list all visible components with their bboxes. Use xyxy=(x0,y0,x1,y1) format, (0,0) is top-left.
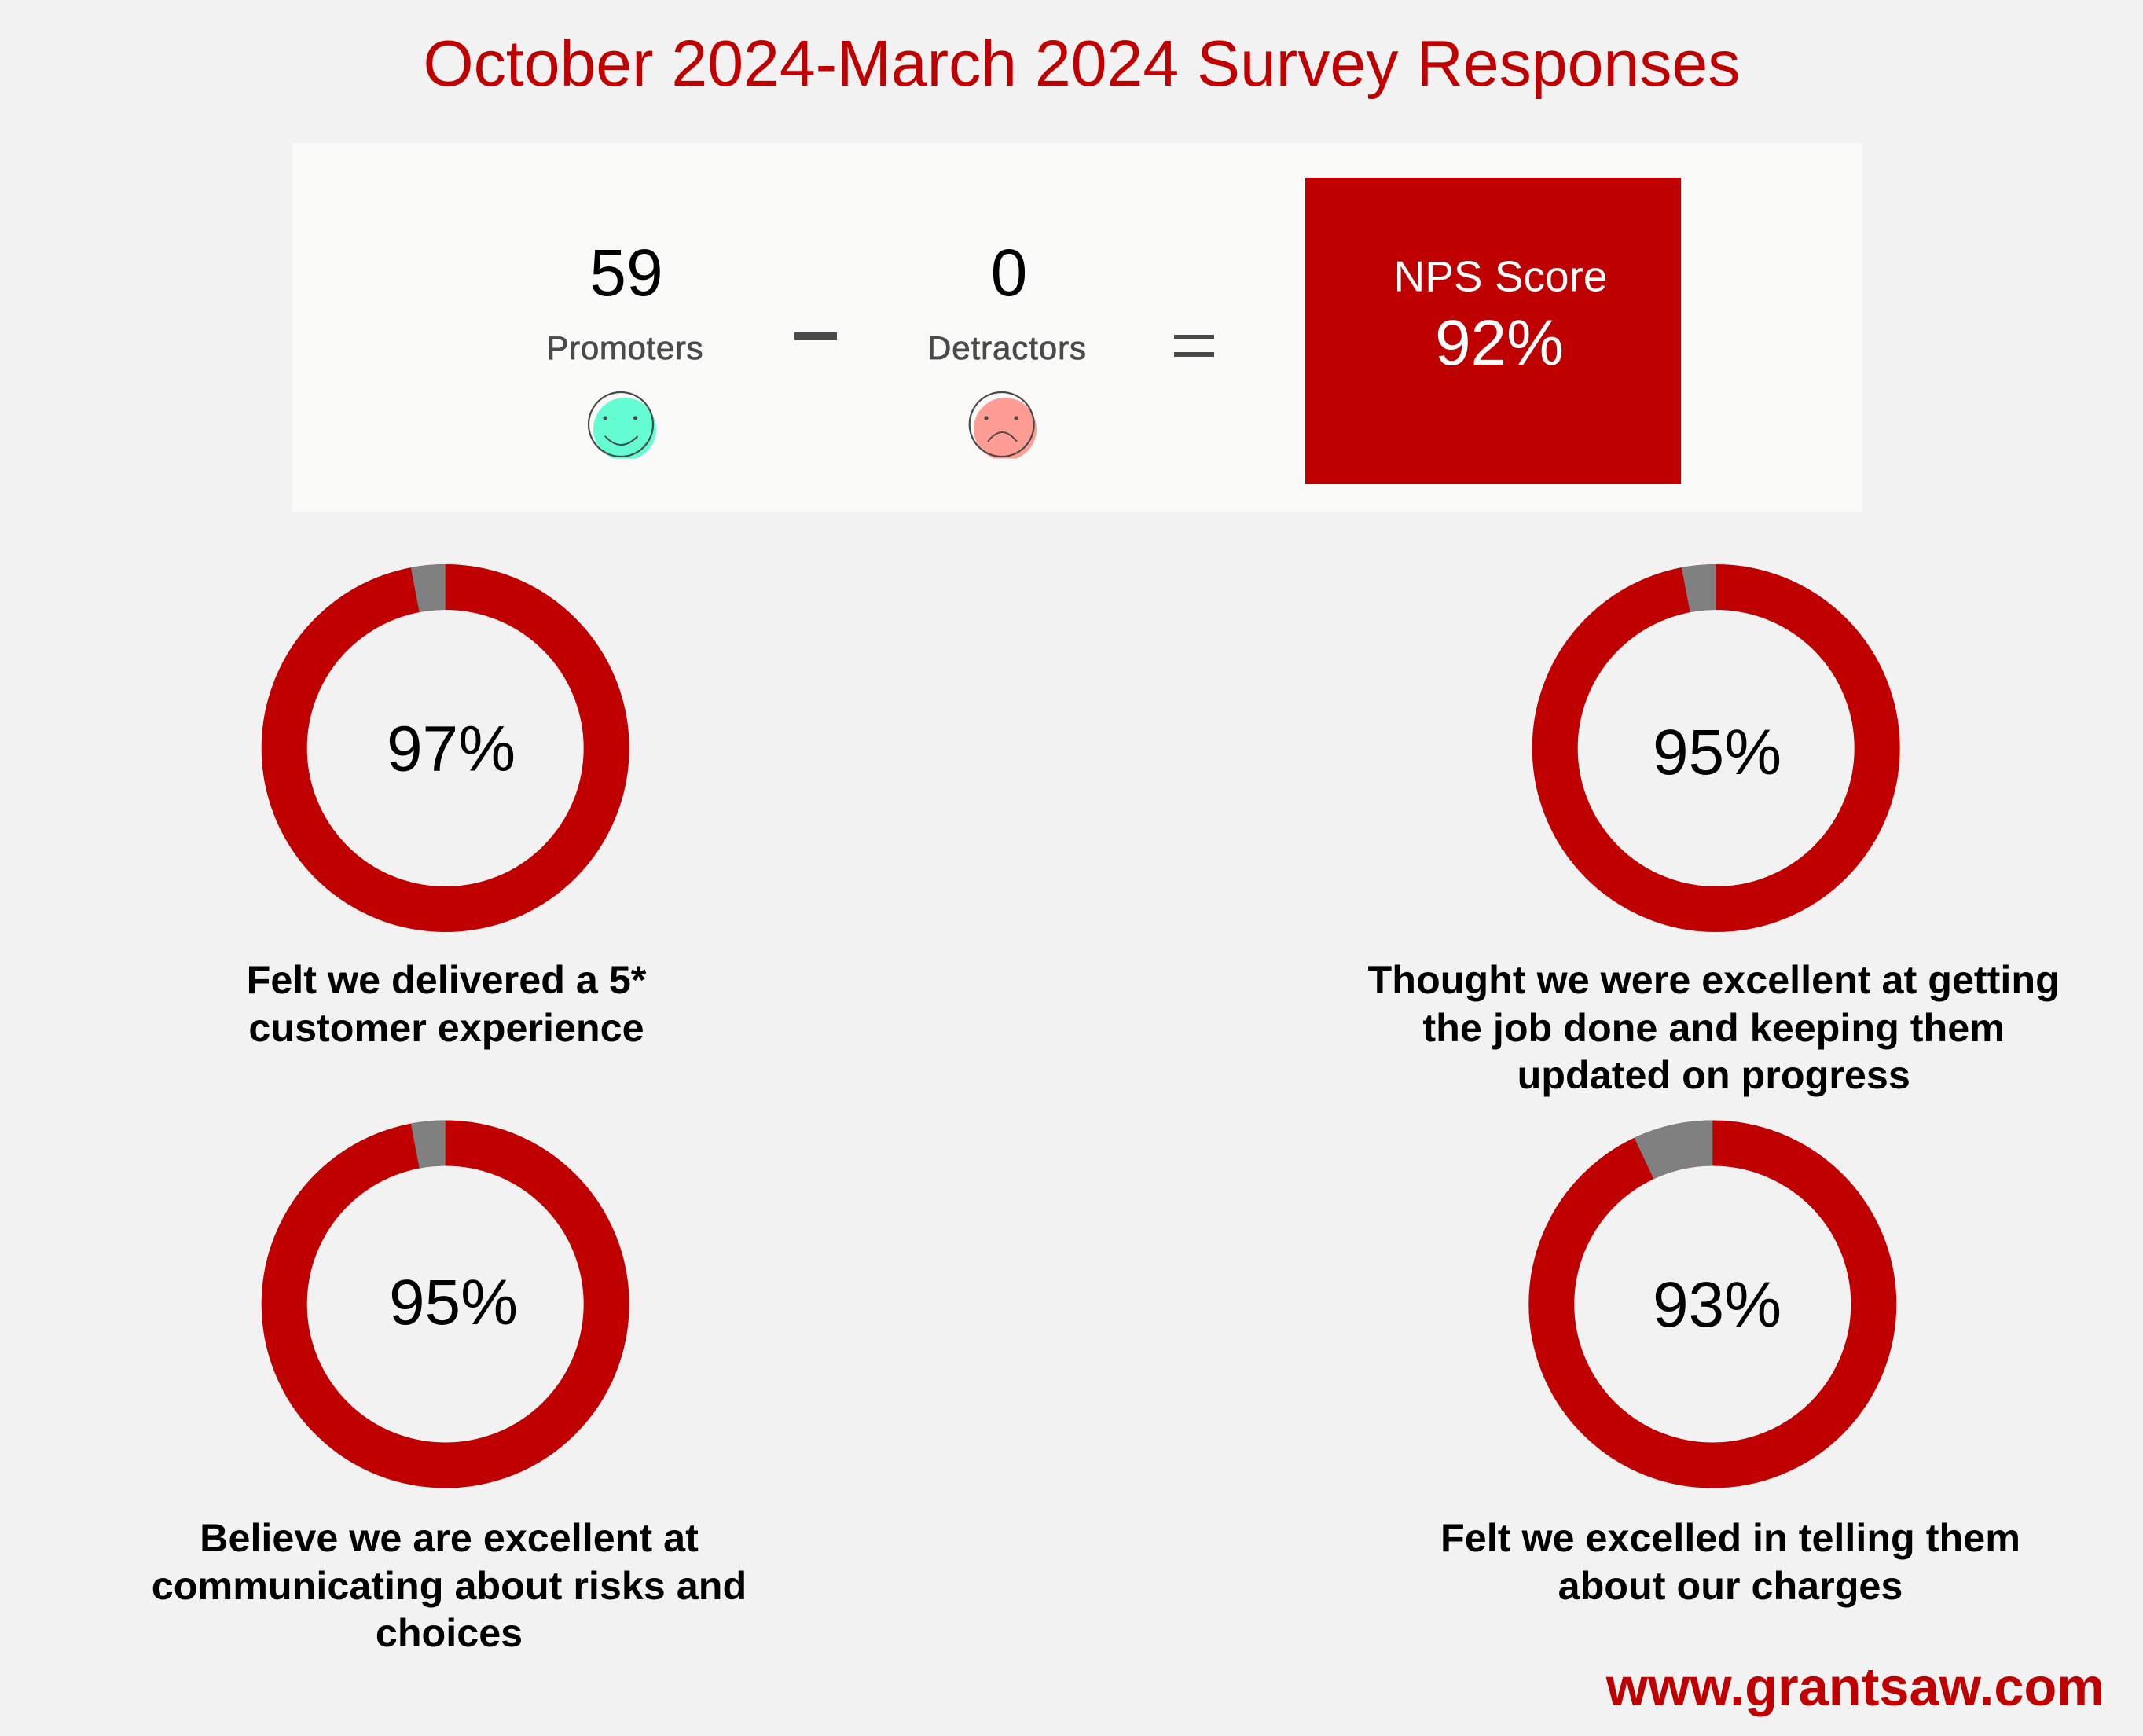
value: 95% xyxy=(1653,717,1782,788)
detractors label: Detractors xyxy=(927,329,1086,366)
caption: Felt we excelled in telling them xyxy=(1440,1515,2020,1560)
NPS score box xyxy=(1305,178,1681,484)
title: October 2024-March 2024 Survey Responses xyxy=(423,28,1740,100)
icon: sad face xyxy=(970,392,1037,461)
value: 97% xyxy=(387,714,516,784)
caption: choices xyxy=(376,1610,523,1655)
website link: www.grantsaw.com xyxy=(1605,1657,2104,1717)
caption: Thought we were excellent at getting xyxy=(1368,957,2060,1002)
promoters label: Promoters xyxy=(547,329,703,366)
caption: Felt we delivered a 5* xyxy=(247,957,647,1002)
donut: 97% five star experience xyxy=(247,564,647,1050)
equals sign xyxy=(1174,335,1214,357)
caption: Believe we are excellent at xyxy=(200,1515,699,1560)
caption: about our charges xyxy=(1558,1563,1903,1608)
promoters count: 59 xyxy=(589,236,663,310)
caption: the job done and keeping them xyxy=(1422,1005,2005,1050)
NPS score label: NPS Score xyxy=(1393,251,1608,300)
donut: 95% communicating about risks xyxy=(152,1120,747,1655)
icon: happy face xyxy=(589,392,656,461)
donut: 93% telling about charges xyxy=(1440,1121,2020,1608)
panel: NPS summary xyxy=(549,178,1681,484)
caption: customer experience xyxy=(248,1005,644,1050)
NPS score value: 92% xyxy=(1435,307,1564,379)
donut: 95% getting the job done xyxy=(1368,564,2060,1097)
detractors count: 0 xyxy=(991,236,1027,310)
caption: updated on progress xyxy=(1517,1052,1910,1097)
value: 95% xyxy=(389,1267,518,1338)
minus sign xyxy=(794,332,837,340)
caption: communicating about risks and xyxy=(152,1563,747,1608)
value: 93% xyxy=(1653,1269,1782,1341)
